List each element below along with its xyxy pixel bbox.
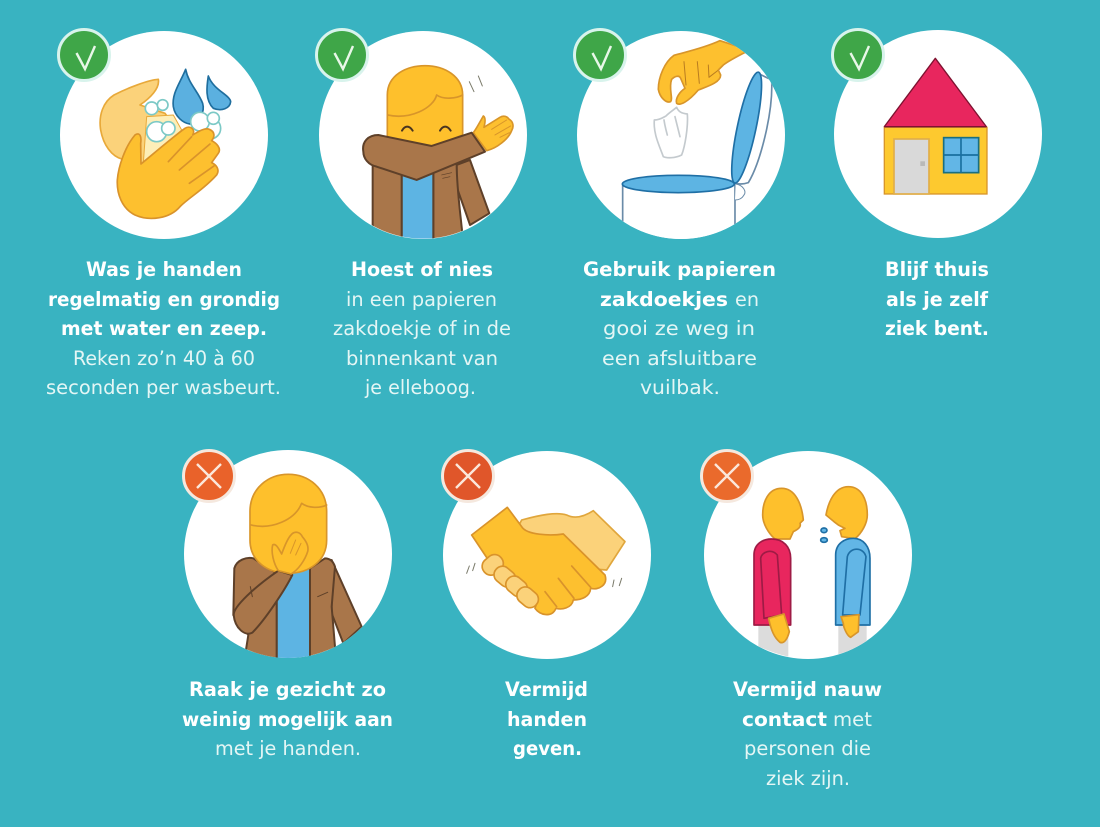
text: wash hands: seconden per wasbeurt. bbox=[46, 376, 281, 399]
text: tissues: vuilbak. bbox=[640, 376, 720, 399]
text: contact bbox=[733, 678, 882, 790]
text: handshake: Vermijd bbox=[505, 678, 588, 701]
white circle: handshake bbox=[443, 451, 651, 659]
icon: handshake bbox=[467, 507, 625, 615]
icon: washing hands bbox=[100, 69, 231, 218]
text: tissues: gooi ze weg in bbox=[603, 317, 755, 340]
text: cough: Hoest of nies bbox=[351, 258, 493, 281]
text: home: Blijf thuis bbox=[885, 258, 989, 281]
text: cough bbox=[333, 258, 511, 399]
text: tissues: Gebruik papieren bbox=[583, 258, 776, 281]
panel: close contact bbox=[702, 450, 912, 790]
text: home: ziek bent. bbox=[885, 317, 989, 340]
text: home bbox=[885, 258, 989, 340]
text: cough: binnenkant van bbox=[346, 347, 498, 370]
text: wash hands: regelmatig en grondig bbox=[48, 288, 280, 311]
icon: person touching face bbox=[233, 474, 362, 668]
badge: cross bbox=[442, 450, 494, 502]
text: home: als je zelf bbox=[886, 288, 988, 311]
text: face bbox=[182, 678, 393, 760]
white circle: contact bbox=[704, 451, 912, 659]
badge: cross bbox=[702, 450, 752, 502]
panel: face touching bbox=[182, 450, 393, 760]
icon: tissue and bin bbox=[622, 41, 772, 253]
icon: person sneezing in elbow bbox=[363, 66, 513, 243]
text: contact: personen die bbox=[744, 737, 871, 760]
text: tissues bbox=[583, 258, 776, 399]
icon: house bbox=[884, 58, 987, 194]
text: contact: ziek zijn. bbox=[766, 767, 850, 790]
text: face: met je handen. bbox=[215, 737, 361, 760]
text: face: Raak je gezicht zo bbox=[189, 678, 386, 701]
text: tissues: zakdoekjes bbox=[600, 288, 728, 311]
panel: wash hands bbox=[46, 30, 281, 399]
white circle: tissues bbox=[577, 31, 785, 239]
white circle: cough bbox=[319, 31, 527, 239]
text: tissues: een afsluitbare bbox=[602, 347, 757, 370]
text: cough: je elleboog. bbox=[364, 376, 476, 399]
text: handshake bbox=[505, 678, 588, 760]
text: face: weinig mogelijk aan bbox=[182, 708, 393, 731]
text: handshake: geven. bbox=[513, 737, 582, 760]
text: tissues: en bbox=[735, 288, 759, 311]
badge: check bbox=[832, 30, 884, 80]
text: cough: in een papieren bbox=[346, 288, 497, 311]
badge: check bbox=[58, 30, 110, 80]
text: wash hands: met water en zeep. bbox=[61, 317, 267, 340]
white circle: wash hands bbox=[60, 31, 268, 239]
badge: cross bbox=[184, 450, 234, 502]
panel: stay home bbox=[832, 30, 1042, 340]
text: wash hands bbox=[46, 258, 281, 399]
white circle: face bbox=[184, 450, 392, 658]
text: contact: contact bbox=[742, 708, 827, 731]
text: contact: met bbox=[833, 708, 872, 731]
text: cough: zakdoekje of in de bbox=[333, 317, 511, 340]
icon: two people bbox=[754, 487, 870, 657]
panel: paper tissues bbox=[574, 30, 785, 399]
badge: check bbox=[574, 30, 626, 80]
text: handshake: handen bbox=[507, 708, 587, 731]
panel: cough or sneeze bbox=[316, 30, 527, 399]
text: wash hands: Reken zo’n 40 à 60 bbox=[73, 347, 255, 370]
badge: check bbox=[316, 30, 368, 80]
panel: handshake bbox=[442, 450, 651, 760]
text: wash hands: Was je handen bbox=[86, 258, 242, 281]
white circle: home bbox=[834, 30, 1042, 238]
text: contact: Vermijd nauw bbox=[733, 678, 882, 701]
